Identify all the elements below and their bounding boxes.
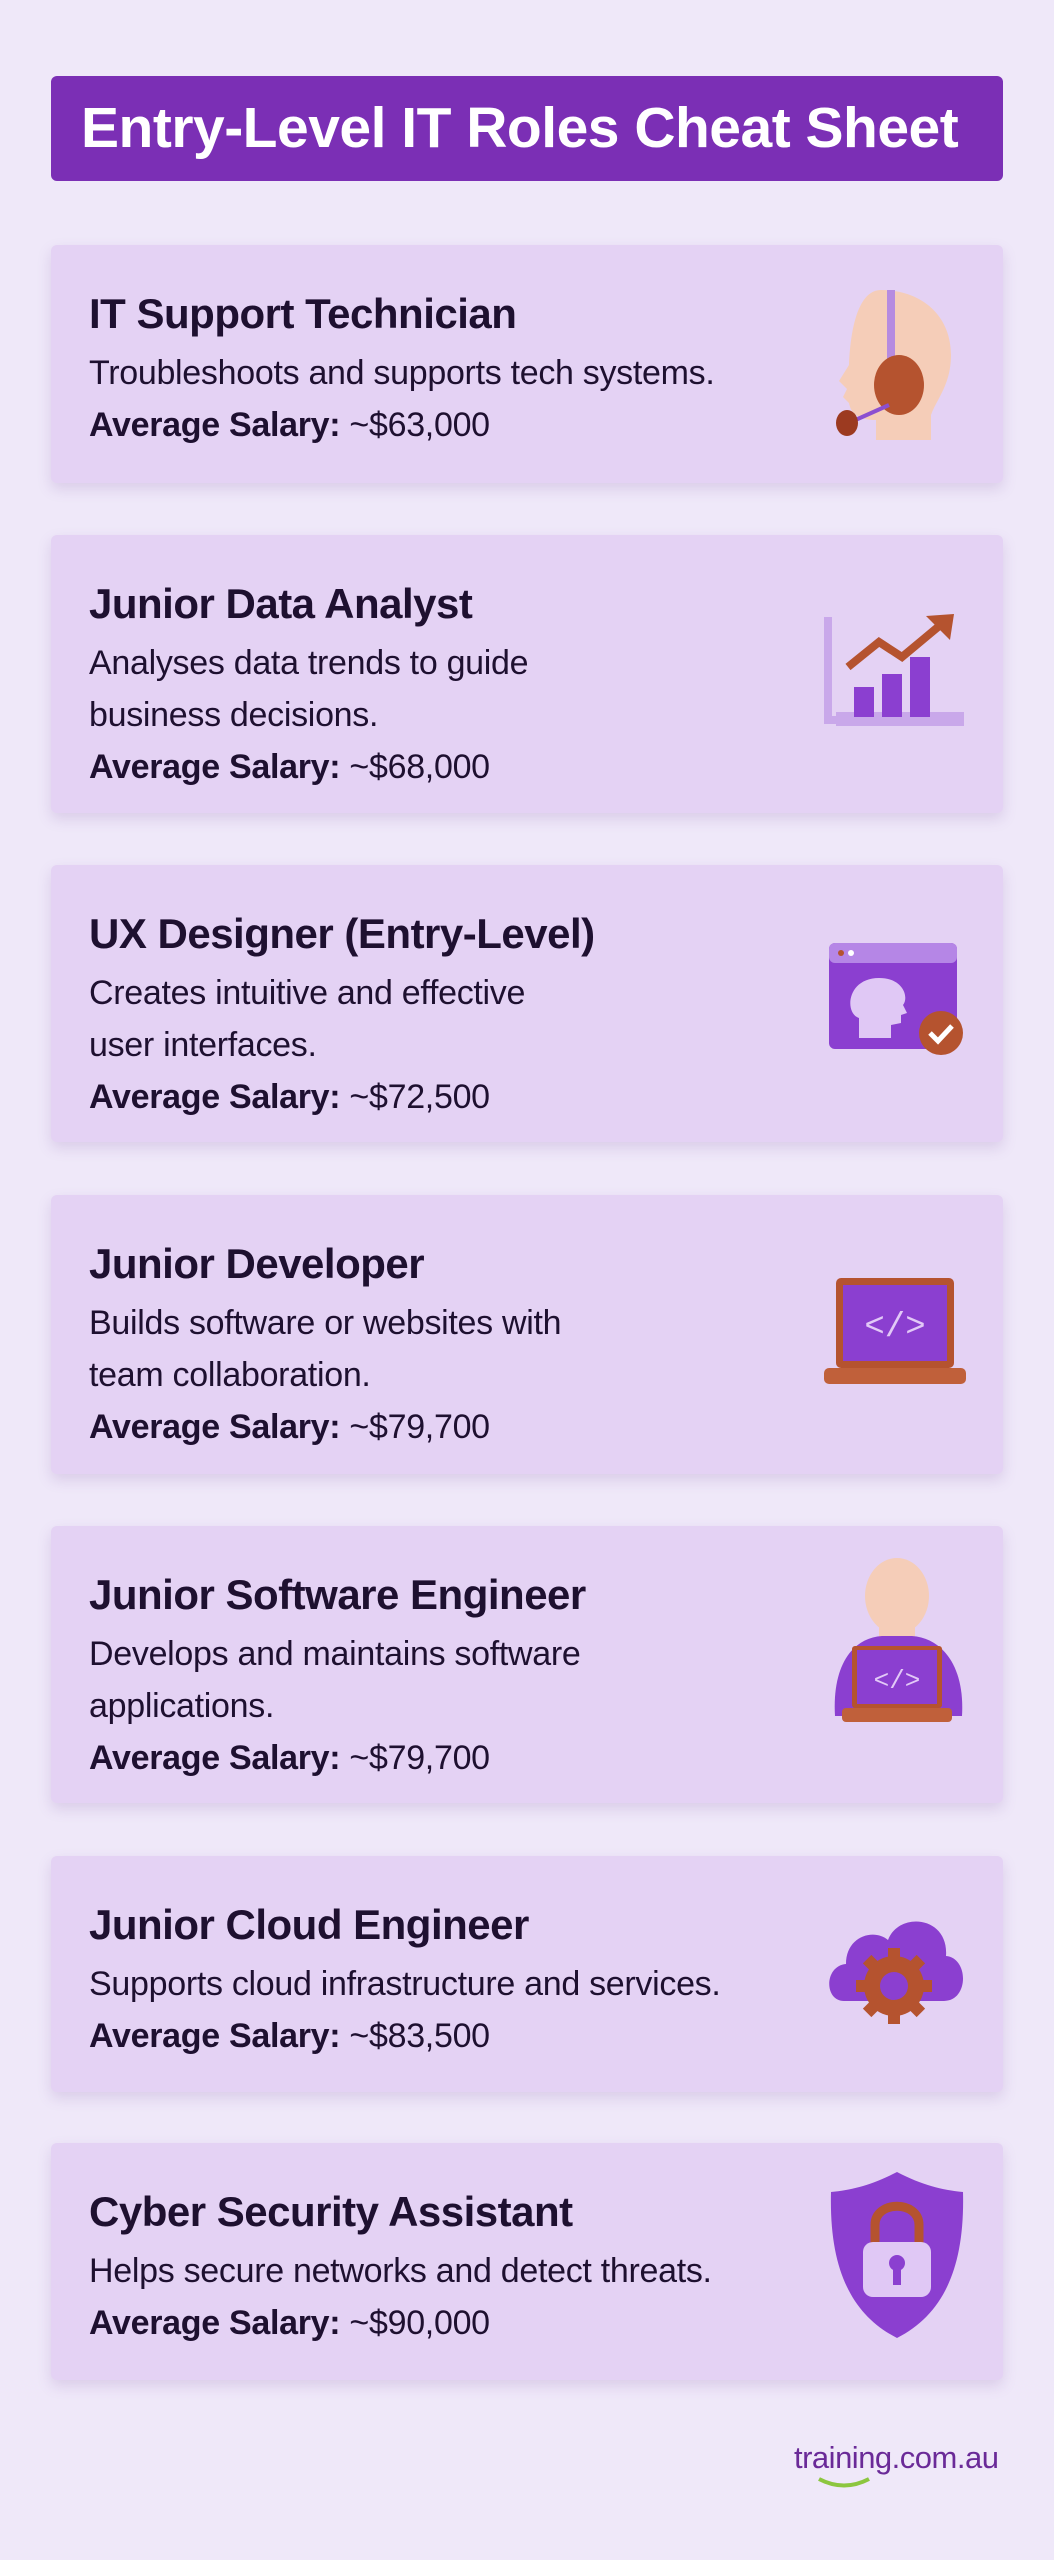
description	[89, 974, 525, 1064]
panel: Junior Developer	[51, 1195, 1003, 1474]
description: Analyses data trends to guide	[89, 644, 528, 682]
description: team collaboration.	[89, 1356, 371, 1394]
icon: cloud gear	[829, 1922, 963, 2024]
panel: Junior Software Engineer	[51, 1526, 1003, 1803]
logo: training.com.au: training.com.au	[794, 2440, 998, 2475]
description: user interfaces.	[89, 1026, 317, 1064]
salary: Average Salary: ~$68,000	[89, 748, 490, 786]
panel: Cyber Security Assistant	[51, 2143, 1003, 2380]
panel: IT Support Technician	[51, 245, 1003, 483]
description: Develops and maintains software	[89, 1635, 581, 1673]
title	[51, 76, 1003, 181]
heading: Junior Data Analyst	[89, 580, 472, 627]
heading: UX Designer (Entry-Level)	[89, 910, 595, 957]
description: Helps secure networks and detect threats.	[89, 2252, 712, 2290]
panel: Junior Data Analyst	[51, 535, 1003, 813]
description: Troubleshoots and supports tech systems.	[89, 354, 715, 392]
description: Creates intuitive and effective	[89, 974, 525, 1012]
description	[89, 644, 528, 734]
heading: Cyber Security Assistant	[89, 2188, 573, 2235]
panel: Junior Cloud Engineer	[51, 1856, 1003, 2092]
icon: engineer with laptop: </>	[874, 1666, 920, 1696]
description: applications.	[89, 1687, 274, 1725]
salary: Average Salary: ~$79,700	[89, 1739, 490, 1777]
description: Builds software or websites with	[89, 1304, 561, 1342]
salary: Average Salary: ~$83,500	[89, 2017, 490, 2055]
panel: UX Designer	[51, 865, 1003, 1142]
title: Entry-Level IT Roles Cheat Sheet	[81, 96, 958, 160]
icon: engineer with laptop	[834, 1558, 962, 1722]
salary: Average Salary: ~$79,700	[89, 1408, 490, 1446]
salary: Average Salary: ~$72,500	[89, 1078, 490, 1116]
icon: UX screen	[829, 943, 963, 1055]
icon: bar chart	[824, 614, 964, 726]
description: business decisions.	[89, 696, 378, 734]
heading: IT Support Technician: IT Support Technician	[89, 290, 516, 337]
heading: Junior Cloud Engineer	[89, 1901, 529, 1948]
description	[89, 1304, 561, 1394]
salary: Average Salary: ~$90,000	[89, 2304, 490, 2342]
description	[89, 1635, 581, 1725]
description: Supports cloud infrastructure and services.	[89, 1965, 721, 2003]
icon: laptop code	[824, 1278, 966, 1384]
heading: Junior Developer	[89, 1240, 424, 1287]
salary: Average Salary: ~$63,000	[89, 406, 490, 444]
icon: laptop code: </>	[864, 1309, 926, 1347]
icon: headset	[836, 290, 951, 440]
heading: Junior Software Engineer	[89, 1571, 586, 1618]
icon: shield lock	[830, 2172, 964, 2338]
